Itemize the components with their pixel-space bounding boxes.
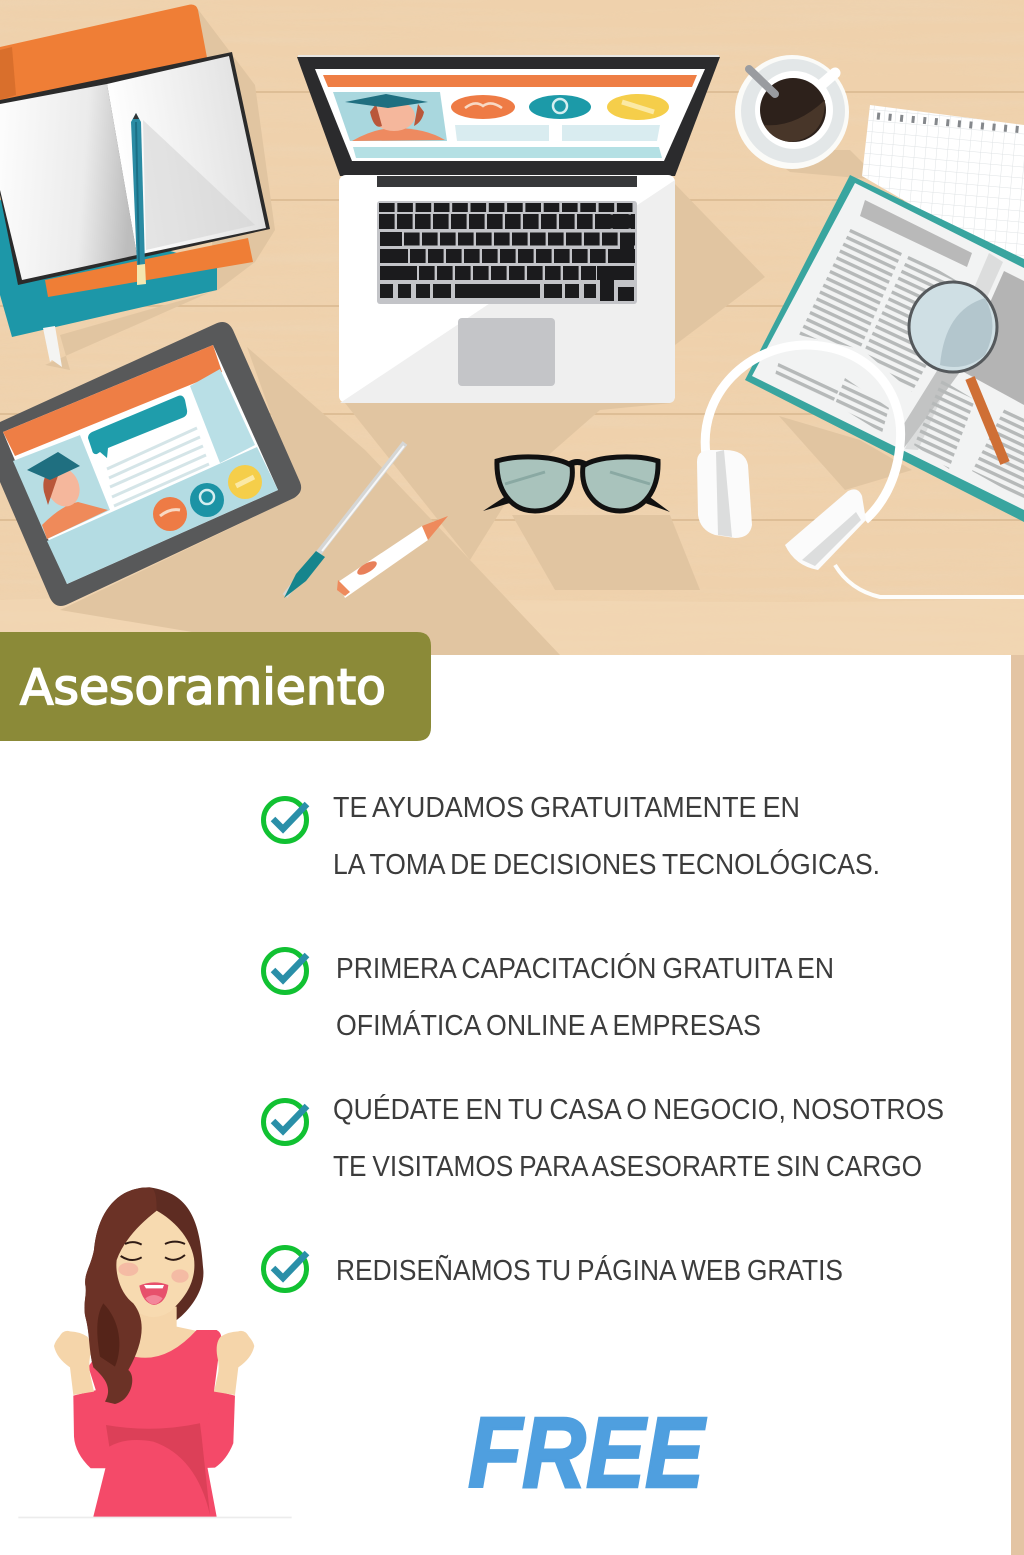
white content panel	[0, 655, 1011, 1555]
heading tab: Asesoramiento: Asesoramiento	[20, 659, 386, 716]
benefit text 1	[333, 792, 880, 881]
hair back	[84, 1187, 203, 1377]
mouth	[139, 1282, 168, 1305]
check icon 1	[264, 798, 307, 842]
benefit text 3	[333, 1093, 944, 1183]
face	[116, 1211, 194, 1317]
front hair	[84, 1187, 157, 1404]
left sleeve	[73, 1390, 110, 1468]
check icon 4	[264, 1248, 307, 1290]
pencil	[131, 113, 146, 285]
eyes and brows	[121, 1242, 185, 1260]
benefit text 3: TE VISITAMOS PARA ASESORARTE SIN CARGO	[333, 1151, 922, 1183]
check icon 2	[264, 950, 307, 992]
heading tab: Asesoramiento	[0, 632, 431, 741]
laptop	[297, 56, 720, 403]
benefit text 2: PRIMERA CAPACITACIÓN GRATUITA EN	[336, 952, 834, 985]
sweater body	[88, 1330, 221, 1517]
cheering woman illustration	[18, 1187, 292, 1518]
benefit text 1: LA TOMA DE DECISIONES TECNOLÓGICAS.	[333, 848, 880, 881]
benefit text 3: QUÉDATE EN TU CASA O NEGOCIO, NOSOTROS	[333, 1093, 944, 1126]
tablet	[0, 322, 301, 606]
glasses	[483, 457, 670, 512]
right sleeve	[197, 1390, 235, 1468]
check icon 3	[264, 1100, 307, 1144]
headphones	[697, 345, 1024, 597]
tablet student avatar	[27, 452, 108, 539]
neck and chest	[113, 1307, 200, 1363]
keyboard keys	[379, 208, 635, 294]
marker	[337, 516, 448, 598]
right fist and arm	[214, 1331, 254, 1395]
coffee cup	[735, 55, 849, 169]
ground line	[18, 1517, 292, 1518]
notebook stack	[0, 5, 270, 367]
open notebook	[0, 52, 270, 285]
benefit text 2: OFIMÁTICA ONLINE A EMPRESAS	[336, 1009, 761, 1042]
laptop student avatar	[345, 94, 445, 141]
right tan edge strip	[1011, 655, 1024, 1555]
blush	[118, 1263, 189, 1283]
magnifying glass	[909, 282, 1005, 463]
benefit text 4: REDISEÑAMOS TU PÁGINA WEB GRATIS	[336, 1253, 843, 1287]
hero illustration: wooden desk	[0, 0, 1024, 655]
FREE label: FREE	[468, 1397, 707, 1509]
spiral notepad	[862, 105, 1024, 270]
left fist and arm	[54, 1331, 94, 1395]
open magazine	[745, 175, 1024, 522]
benefit text 1: TE AYUDAMOS GRATUITAMENTE EN	[333, 792, 800, 824]
benefit text 2	[336, 952, 834, 1042]
pen	[284, 443, 405, 598]
